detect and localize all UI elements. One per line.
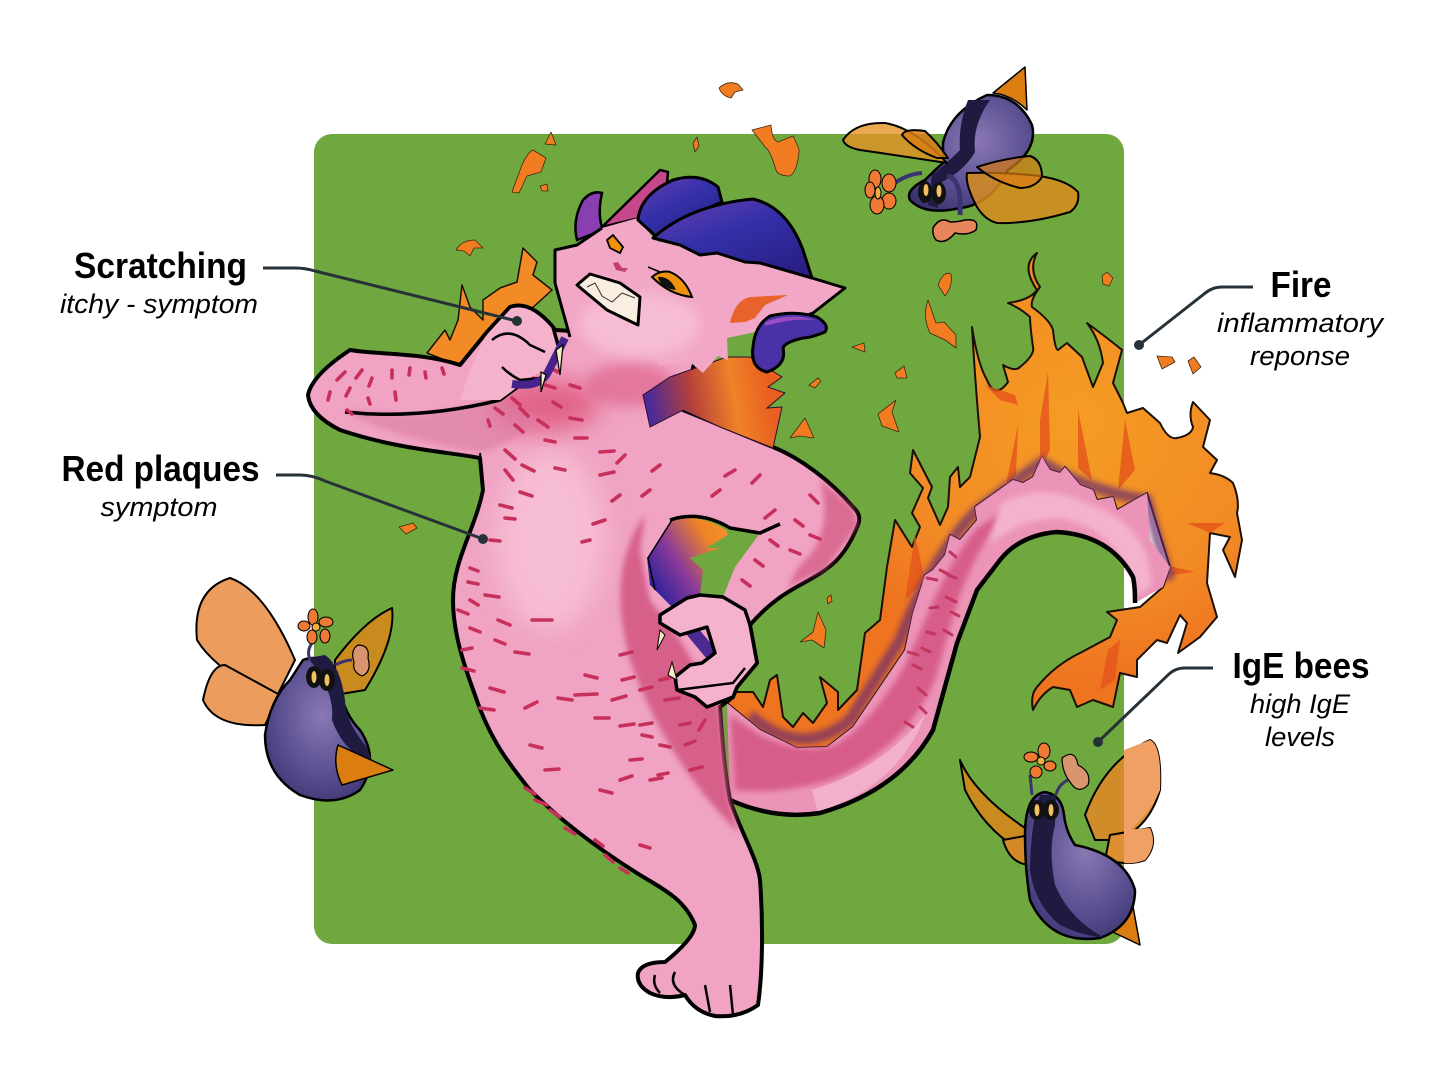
body plaques bbox=[328, 368, 820, 873]
chest redness bbox=[490, 379, 600, 431]
hair: front lock bbox=[653, 199, 812, 278]
label: fire bbox=[1217, 264, 1385, 371]
neck tuft bbox=[643, 357, 785, 448]
IgE bee: left bbox=[196, 578, 393, 800]
cat tail bbox=[727, 457, 1170, 815]
IgE bee: bottom right bbox=[960, 740, 1160, 945]
label: red plaques: Red plaques bbox=[62, 448, 260, 489]
label: scratching: Scratching bbox=[74, 245, 247, 286]
tail outline bbox=[730, 532, 1135, 815]
leader line: IgE bees bbox=[1093, 668, 1213, 747]
leader line: fire bbox=[1134, 287, 1253, 350]
label: IgE bees: levels bbox=[1265, 722, 1335, 752]
green background panel bbox=[314, 134, 1124, 944]
cat head bbox=[555, 177, 845, 373]
neck shade bbox=[585, 363, 675, 407]
label: IgE bees: high IgE bbox=[1250, 689, 1351, 719]
label: red plaques: symptom bbox=[100, 492, 218, 522]
tail scales bbox=[905, 552, 959, 727]
muzzle highlight bbox=[580, 293, 700, 357]
elbow shading bbox=[787, 480, 858, 587]
label: scratching bbox=[60, 245, 258, 319]
horn: right bbox=[753, 313, 826, 372]
label: IgE bees: IgE bees bbox=[1232, 645, 1370, 686]
label: fire: Fire bbox=[1270, 264, 1332, 305]
leader line: scratching bbox=[263, 268, 522, 326]
left hand claws bbox=[541, 345, 563, 392]
body highlight bbox=[495, 450, 605, 630]
label: red plaques bbox=[62, 448, 260, 522]
label: fire: reponse bbox=[1250, 341, 1350, 371]
label: scratching: itchy - symptom bbox=[60, 289, 258, 319]
eye: left bbox=[607, 235, 623, 253]
purple staff in fist bbox=[512, 338, 565, 385]
left flame behind hand bbox=[427, 248, 552, 370]
tail tuft in arm gap bbox=[647, 518, 728, 607]
ear: left bbox=[602, 170, 668, 227]
label: fire: inflammatory bbox=[1217, 308, 1385, 338]
tail flame shadow bbox=[750, 462, 1170, 739]
purple staff under hand bbox=[672, 607, 712, 655]
scattered flame embers bbox=[399, 83, 1201, 648]
eye: right bbox=[652, 272, 692, 297]
brow bbox=[648, 267, 660, 272]
tail flames bbox=[727, 253, 1242, 748]
tail lower shading bbox=[730, 510, 1005, 791]
foot toe lines bbox=[654, 972, 733, 1015]
label: IgE bees bbox=[1232, 645, 1370, 752]
arm shadow bbox=[345, 400, 545, 453]
right hand bbox=[660, 595, 757, 707]
right hand claws bbox=[657, 630, 677, 680]
body shading right bbox=[620, 515, 738, 832]
flame inner streaks bbox=[905, 372, 1225, 690]
tail arch highlight bbox=[990, 492, 1152, 595]
right arm hole bbox=[670, 516, 760, 607]
nose bbox=[613, 262, 628, 272]
horn: left bbox=[575, 192, 603, 240]
left hand bbox=[460, 306, 560, 400]
tail highlight band bbox=[812, 715, 925, 812]
inner ear bbox=[730, 295, 788, 323]
cat body bbox=[308, 306, 859, 1016]
mouth bbox=[577, 274, 640, 325]
IgE bee: top bbox=[843, 67, 1078, 241]
leader line: red plaques bbox=[276, 475, 488, 544]
hair: back lock bbox=[638, 177, 722, 240]
